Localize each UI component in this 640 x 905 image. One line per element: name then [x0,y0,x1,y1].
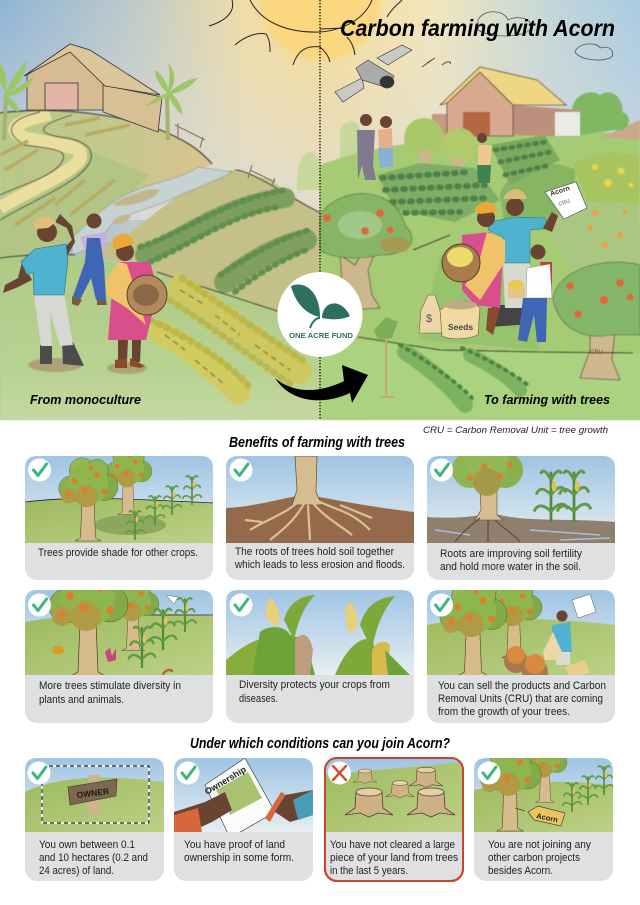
check mark [28,594,51,616]
card: fertility [427,456,615,580]
land owner scene: OWNER [76,786,110,800]
logo [278,272,362,357]
river islands [112,189,160,224]
income text: You can sell the products and Carbon [438,680,606,692]
red cross [328,762,351,784]
check mark [176,762,200,784]
proof text: You have proof of land [184,839,285,851]
hill ridge line [0,111,212,164]
no other projects text: You are not joining any [488,839,591,851]
proof text [184,839,294,864]
no other projects text [488,839,591,877]
boy in distance [477,133,492,183]
no other projects text: other carbon projects [488,852,580,864]
house door [463,112,490,136]
big leaf plant [572,92,629,135]
roots text: which leads to less erosion and floods. [234,559,405,571]
house front wall [447,72,513,136]
birds [422,58,451,67]
no clearing text: piece of your land from trees [330,852,458,864]
income text [438,680,606,718]
apple tree left canopy [320,194,412,258]
right side landscape [297,67,640,420]
back hill right of river [70,170,320,325]
paper held by farmer [545,182,587,219]
card: shade [25,448,213,580]
land size text: 24 acres) of land. [39,865,114,877]
card: proof [174,758,313,881]
CRU note: CRU = Carbon Removal Unit = tree growth [423,425,608,436]
man in blue shirt [3,214,84,366]
check mark [230,594,252,616]
seeds sack [440,300,480,339]
annex [432,114,452,136]
boy in overalls [72,214,107,306]
diversity text: More trees stimulate diversity in [39,680,181,692]
protection text [239,679,390,705]
diversity scene [25,590,213,675]
card border [325,758,463,881]
house side wall [513,105,580,137]
paper held by farmer: Acorn [549,185,571,198]
woman in pink dress [442,202,505,335]
arrow [275,365,368,403]
palm left [0,60,34,140]
protection text: diseases. [239,693,278,705]
left side landscape [0,111,320,420]
corn closeup scene [226,590,414,675]
card: protection [226,590,414,723]
small crop rows [0,118,130,225]
income text: Removal Units (CRU) that are coming [438,693,603,705]
no clearing text: in the last 5 years. [330,865,408,877]
right trees canopy [573,153,640,205]
check mark [430,594,453,616]
fertility text [440,548,582,573]
barn door [45,83,78,110]
boy with backpack [508,244,552,342]
fertility text: and hold more water in the soil. [440,561,581,573]
back trees [404,118,444,158]
card: no other projects [474,758,613,881]
shade text: Trees provide shade for other crops. [38,547,198,559]
roots scene [226,456,414,543]
caption left: From monoculture [30,392,141,407]
clouds [478,12,613,60]
roots text [234,546,405,571]
boots of farmer [490,305,530,327]
stumps scene [325,759,463,832]
acorn tag scene: Acorn [536,811,559,825]
bush rows [405,352,465,405]
no clearing text [330,839,458,877]
proof text: ownership in some form. [184,852,294,864]
diversity text [39,680,181,706]
card: income [427,580,615,723]
barn [24,44,162,132]
income text: from the growth of your trees. [438,706,570,718]
shade scene [25,448,213,543]
heading: benefits: Benefits of farming with trees [229,435,405,451]
card: diversity [25,590,213,723]
caption right: To farming with trees [484,392,610,407]
woman with basket [106,234,167,368]
sun [209,0,402,65]
check mark [28,762,50,784]
no clearing text: You have not cleared a large [330,839,455,851]
land size text: You own between 0.1 [39,839,135,851]
dark bushes [500,164,575,230]
apple tree right canopy [553,262,640,336]
far hill with fields [0,111,212,262]
sapling [374,317,398,397]
field boundary [0,254,280,312]
diversity text: plants and animals. [39,694,124,706]
satellite [335,45,412,102]
card: no clearing [325,758,463,881]
lower ground [320,335,640,420]
right ground [320,132,640,420]
thatch roof [24,44,160,95]
money sack: $ [426,313,432,325]
money sack [419,295,442,333]
palm right [146,63,198,140]
winding road [0,114,81,208]
check mark [478,762,500,784]
house roof [440,67,566,105]
fertility text: Roots are improving soil fertility [440,548,582,560]
fruit [323,209,634,318]
farmer man [488,189,558,308]
apple tree right trunk [580,320,620,380]
logo: ONE ACRE FUND [289,331,354,340]
ownership document scene: Ownership [203,764,248,797]
hero illustration [0,0,640,420]
title: Carbon farming with Acorn [340,15,615,41]
no other projects text: besides Acorn. [488,865,553,877]
couple in distance [357,114,393,180]
barn gable wall [27,45,105,110]
land size text [39,839,148,877]
corn patch [377,163,500,222]
CRU label on tree: CRU [590,350,603,356]
yellow crop rows [180,287,300,372]
fertility scene [427,456,615,543]
fence [175,123,275,185]
check mark [28,458,51,482]
river [72,167,232,255]
income scene [427,590,615,675]
soil patches [28,358,82,372]
check mark [230,458,252,482]
card: roots [226,456,414,580]
green field left [0,150,150,262]
barn side wall [103,85,162,132]
foreground field [0,255,320,420]
apple tree left trunk [340,245,380,310]
seeds sack: Seeds [448,322,473,332]
sky [0,0,640,420]
divider [319,0,321,419]
land size text: and 10 hectares (0.2 and [39,852,148,864]
field line right [358,235,633,353]
paper held by farmer: CRU [558,199,571,208]
check mark [430,458,453,482]
roots text: The roots of trees hold soil together [235,546,394,558]
heading: conditions: Under which conditions can you join Acorn? [190,736,450,752]
protection text: Diversity protects your crops from [239,679,390,691]
hedges on horizon [297,121,360,190]
card: land size [25,758,164,881]
green crop rows [145,198,285,255]
